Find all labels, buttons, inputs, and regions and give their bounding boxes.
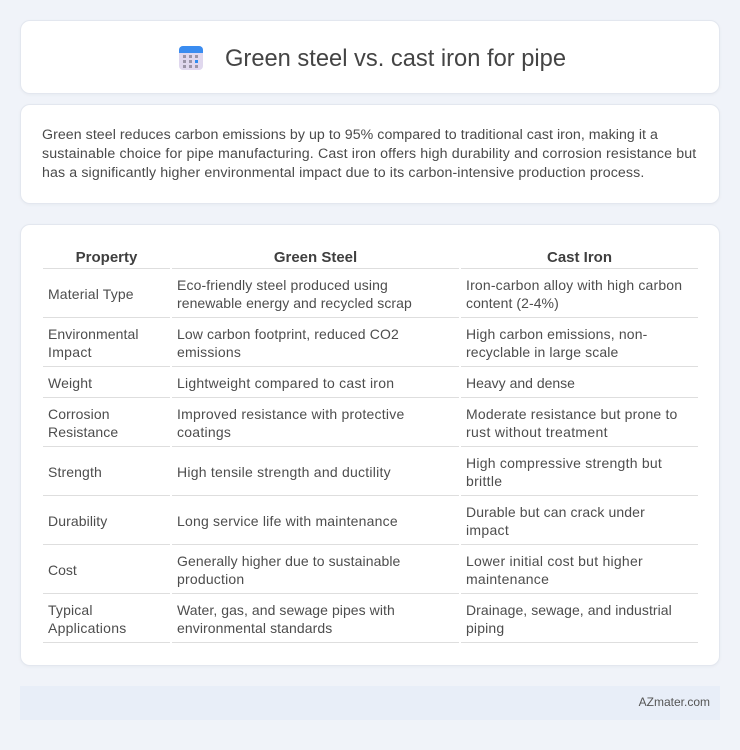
column header: Property: Property: [76, 249, 137, 266]
row: Durability: impact: [466, 522, 509, 538]
row: Typical Applications: piping: [466, 620, 504, 636]
row: Durability: Durable but can crack under: [466, 504, 645, 520]
panel: intro text: [20, 104, 720, 204]
row: Cost: Cost: [48, 562, 77, 578]
panel: comparison table: [20, 224, 720, 666]
intro line 2: sustainable choice for pipe manufacturing. Cast iron offers high durability and corrosion resistance but: [42, 146, 696, 162]
row: Strength: [48, 455, 662, 489]
row: Durability: Durability: [48, 513, 107, 529]
row: Material Type: Iron-carbon alloy with high carbon: [466, 277, 682, 293]
row: Material Type: [48, 277, 682, 311]
row: Typical Applications: [48, 602, 672, 636]
column header: Green Steel: Green Steel: [274, 249, 357, 266]
row: Strength: Strength: [48, 464, 102, 480]
row: Durability: [48, 504, 645, 538]
row: Environmental Impact: [48, 326, 647, 360]
row: Corrosion Resistance: coatings: [177, 424, 231, 440]
row: Corrosion Resistance: Resistance: [48, 424, 118, 440]
column header: Cast Iron: Cast Iron: [547, 249, 612, 266]
row: Weight: [48, 375, 575, 391]
intro line 1: Green steel reduces carbon emissions by up to 95% compared to traditional cast iron, making it a: [42, 127, 658, 143]
row: Corrosion Resistance: Improved resistance with protective: [177, 406, 404, 422]
row: Cost: Generally higher due to sustainable: [177, 553, 400, 569]
row: Cost: [48, 553, 643, 587]
row: Typical Applications: Water, gas, and sewage pipes with: [177, 602, 395, 618]
row: Corrosion Resistance: [48, 406, 678, 440]
row: Cost: Lower initial cost but higher: [466, 553, 643, 569]
row: Weight: Lightweight compared to cast iron: [177, 375, 394, 391]
row: Environmental Impact: High carbon emissions, non-: [466, 326, 647, 342]
row: Typical Applications: Drainage, sewage, and industrial: [466, 602, 672, 618]
icon: calendar grid: [179, 46, 203, 70]
footer bar: [20, 686, 720, 720]
row: Environmental Impact: Impact: [48, 344, 92, 360]
row: Typical Applications: Applications: [48, 620, 126, 636]
row: Environmental Impact: recyclable in large scale: [466, 344, 618, 360]
row: Typical Applications: Typical: [48, 602, 93, 618]
row: Durability: Long service life with maintenance: [177, 513, 398, 529]
row: Strength: brittle: [466, 473, 502, 489]
row: Typical Applications: environmental standards: [177, 620, 332, 636]
row: Weight: Heavy and dense: [466, 375, 575, 391]
intro line 3: has a significantly higher environmental impact due to its carbon-intensive production process.: [42, 165, 644, 181]
row: Material Type: renewable energy and recycled scrap: [177, 295, 412, 311]
row: Strength: High tensile strength and ductility: [177, 464, 391, 480]
row: Corrosion Resistance: Corrosion: [48, 406, 110, 422]
row: Material Type: Material Type: [48, 286, 134, 302]
row: Environmental Impact: Low carbon footprint, reduced CO2: [177, 326, 399, 342]
row: Environmental Impact: Environmental: [48, 326, 139, 342]
row: Cost: maintenance: [466, 571, 549, 587]
title: Green steel vs. cast iron for pipe: [225, 46, 566, 72]
row: Strength: High compressive strength but: [466, 455, 662, 471]
row: Material Type: content (2-4%): [466, 295, 559, 311]
footer credit: AZmater.com: [639, 695, 710, 709]
row: Cost: production: [177, 571, 244, 587]
row: Corrosion Resistance: Moderate resistance but prone to: [466, 406, 678, 422]
row: Material Type: Eco-friendly steel produced using: [177, 277, 388, 293]
row: Weight: Weight: [48, 375, 92, 391]
row: Environmental Impact: emissions: [177, 344, 241, 360]
row: Corrosion Resistance: rust without treatment: [466, 424, 608, 440]
panel: header: [20, 20, 720, 94]
